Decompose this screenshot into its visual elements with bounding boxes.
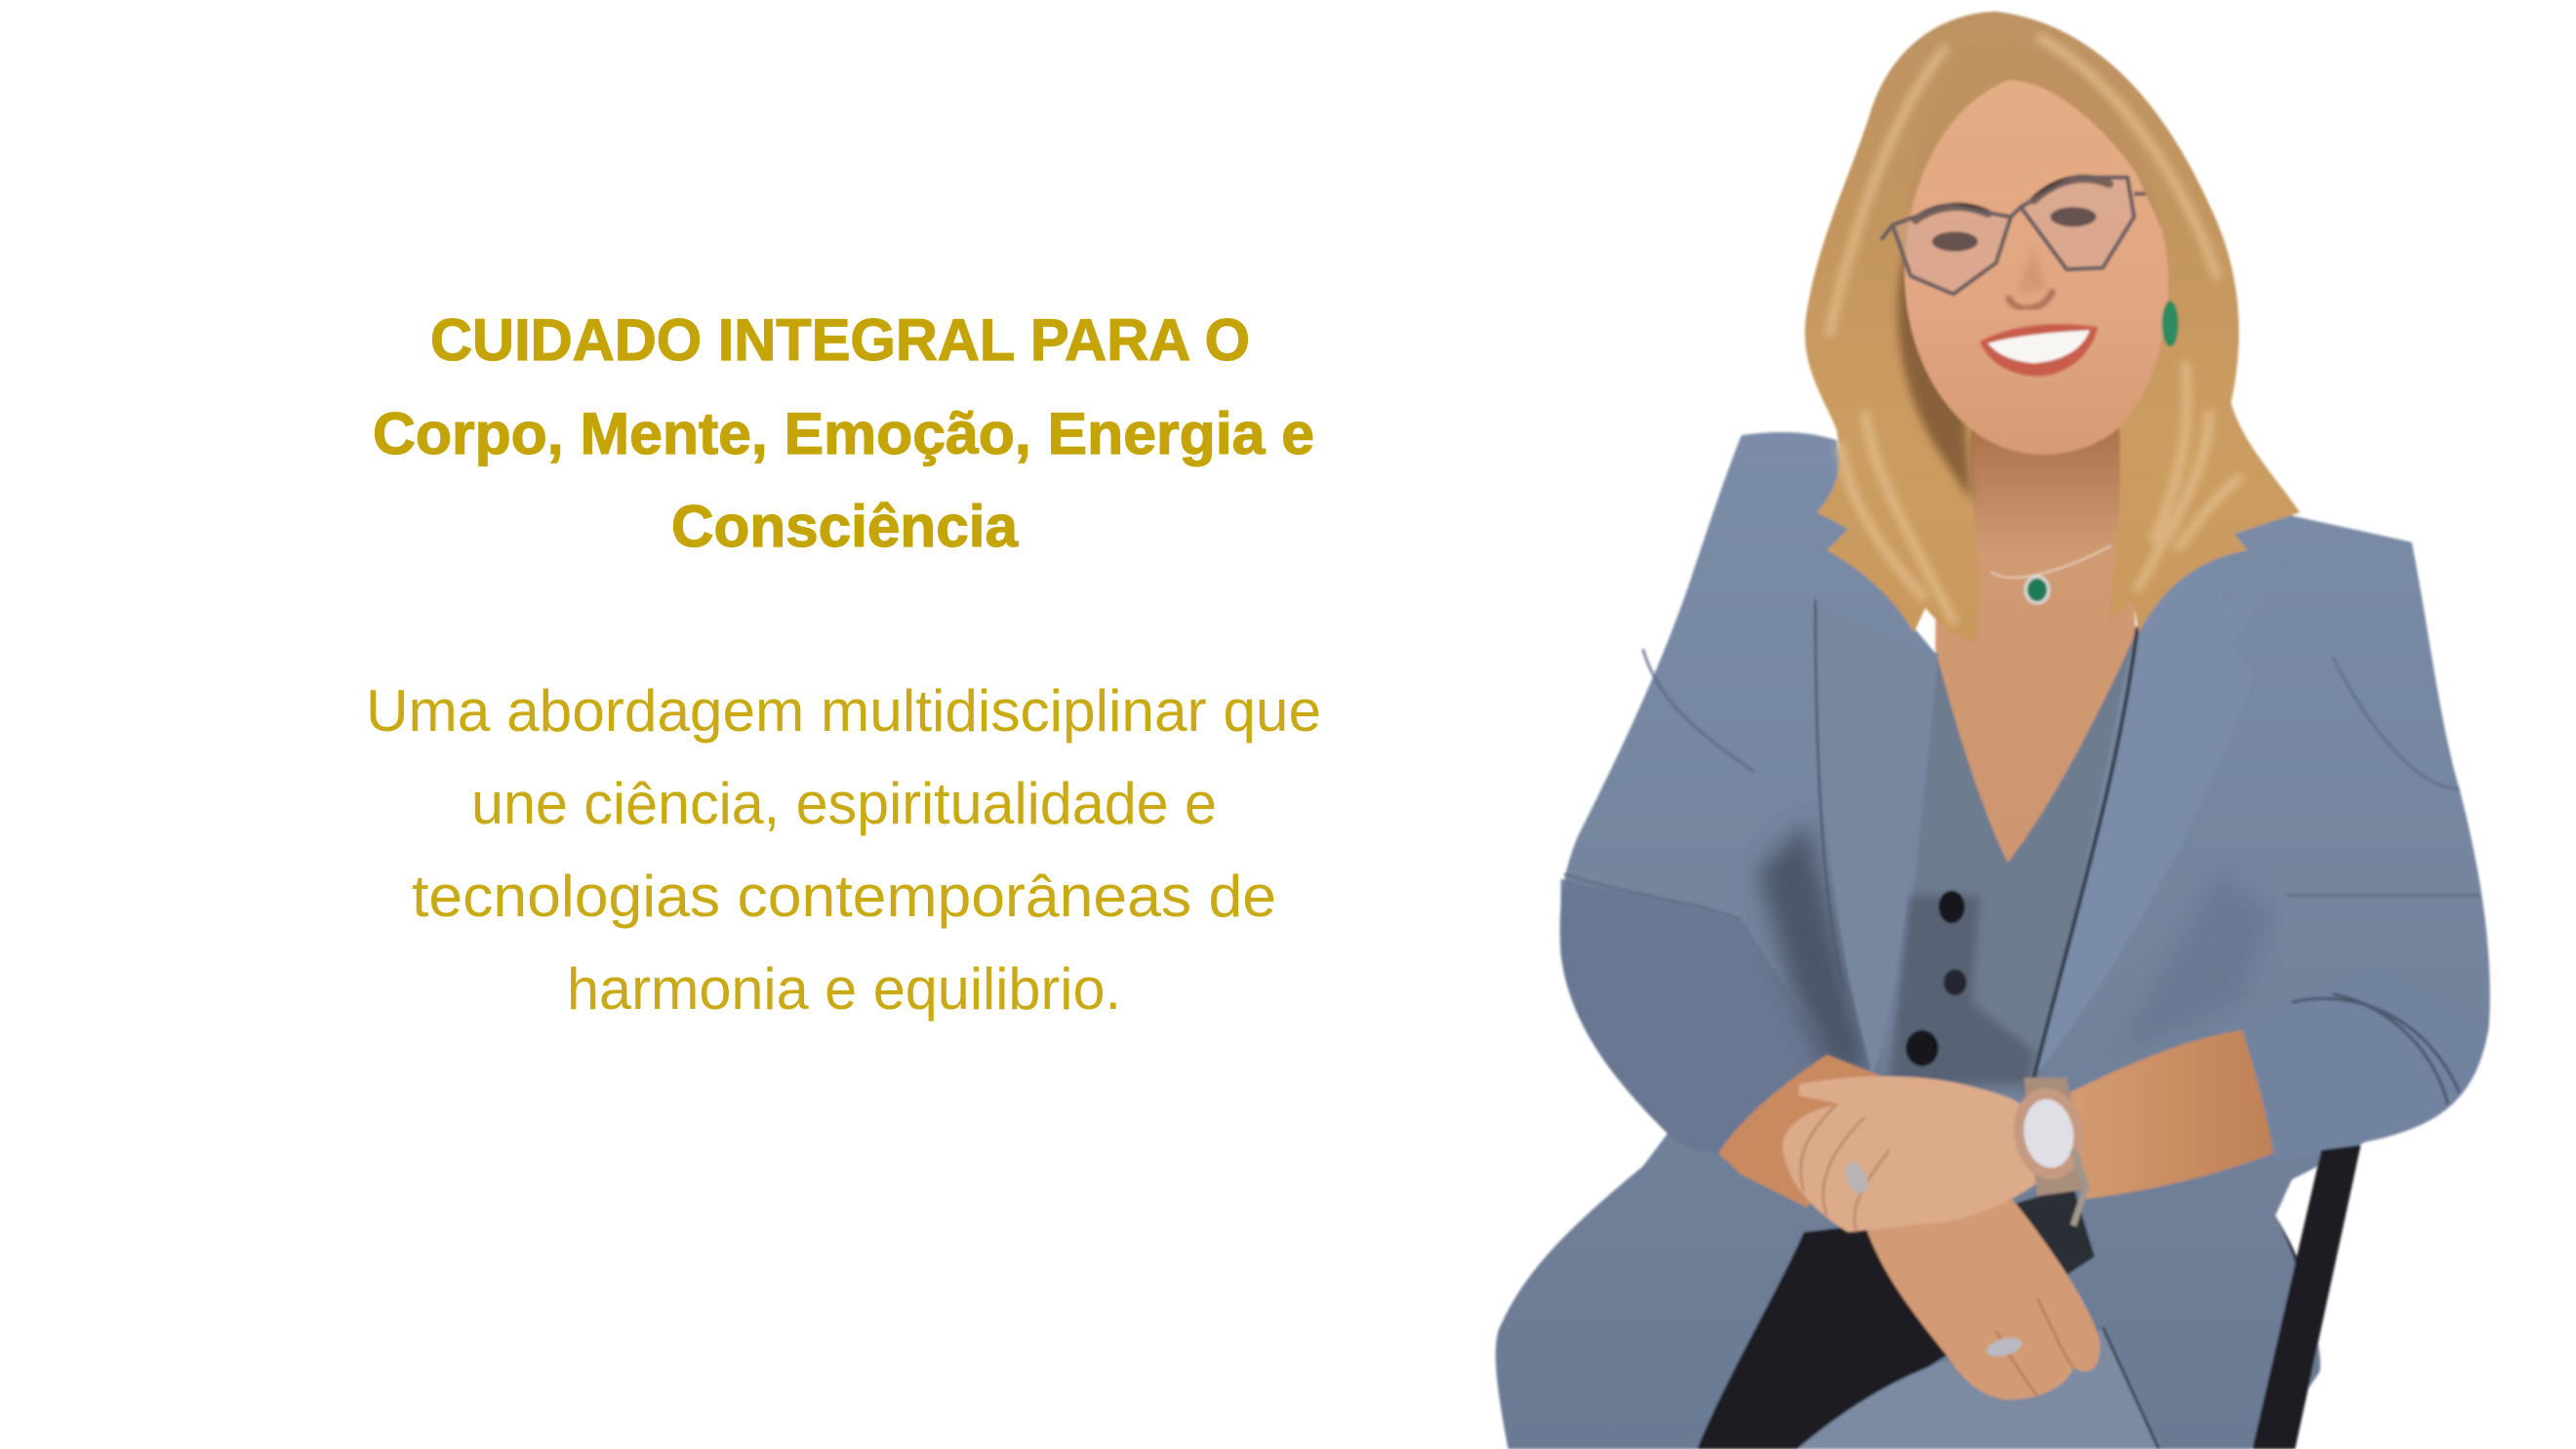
left forearm	[1718, 1055, 1881, 1207]
ring lower hand	[1985, 1335, 2024, 1360]
body line 1: Uma abordagem multidisciplinar que	[366, 678, 1321, 744]
watch case	[2008, 1083, 2089, 1184]
vest button 3	[1906, 1030, 1939, 1067]
right forearm	[2070, 1030, 2274, 1199]
body line 4: harmonia e equilibrio.	[567, 956, 1121, 1022]
skirt seam line	[2103, 1327, 2158, 1449]
cuff fold lines	[2292, 994, 2459, 1104]
bracelet	[2073, 1150, 2086, 1226]
right eye	[2050, 207, 2096, 226]
upper hand fingers	[1800, 1104, 1889, 1232]
vest button 2	[1944, 969, 1966, 995]
neck and chest	[1935, 419, 2136, 863]
face	[1905, 79, 2168, 455]
shadow under arms	[2012, 1187, 2095, 1281]
eyebrows	[1915, 179, 2110, 221]
hair parting over forehead	[1903, 41, 2162, 230]
blazer body	[1496, 432, 2490, 1449]
necklace pendant	[2026, 577, 2049, 603]
hair highlights	[1829, 36, 2242, 624]
heading line 3: Consciência	[671, 494, 1019, 559]
hair	[1805, 12, 2300, 644]
eyes	[1932, 207, 2096, 252]
vest	[1881, 624, 2136, 1093]
shadow beside lapel	[1758, 822, 1872, 1077]
heading line 1: CUIDADO INTEGRAL PARA O	[430, 307, 1250, 373]
sleeve fold line	[1564, 649, 1754, 920]
heading line 2: Corpo, Mente, Emoção, Energia e	[373, 401, 1314, 466]
body line 2: une ciência, espiritualidade e	[471, 771, 1217, 836]
chair leg	[2252, 1146, 2360, 1449]
right lapel	[2033, 490, 2287, 1077]
shadow in right sleeve	[2119, 870, 2275, 1052]
vest button 1	[1939, 891, 1965, 923]
left lapel	[1817, 605, 1939, 1077]
lips	[1980, 324, 2098, 377]
lower hand	[1865, 1199, 2100, 1399]
portrait: smiling woman in grey-blue suit	[1496, 12, 2490, 1449]
vest dark fold	[1889, 896, 2033, 1084]
cheek shadow under nose	[2018, 247, 2045, 293]
dark trousers shadow	[1697, 1224, 1947, 1449]
lower hand fingers	[1996, 1298, 2073, 1396]
hair shadow left of face	[1898, 247, 1971, 502]
glasses	[1881, 178, 2146, 294]
ring upper hand	[1840, 1159, 1872, 1197]
teeth	[1988, 330, 2090, 363]
chair back strut	[2259, 1196, 2300, 1278]
heading: cuidado integral	[373, 307, 1314, 559]
upper hand	[1783, 1076, 2037, 1232]
right sleeve fold	[2287, 657, 2480, 896]
left sleeve lower	[1560, 879, 1827, 1153]
skirt	[1797, 1327, 2158, 1449]
left eye	[1932, 231, 1978, 252]
blazer left edge line	[1815, 600, 1843, 986]
nose shadow	[2007, 289, 2054, 308]
body line 3: tecnologias contemporâneas de	[412, 864, 1276, 929]
watch face	[2020, 1096, 2077, 1171]
necklace chain	[1992, 545, 2112, 578]
body text block	[366, 678, 1321, 1022]
watch band	[2024, 1077, 2086, 1196]
earring	[2162, 301, 2179, 346]
right sleeve cuff	[2242, 969, 2489, 1163]
lapel edge line	[2033, 627, 2137, 1077]
highlight strands	[1829, 36, 2242, 624]
